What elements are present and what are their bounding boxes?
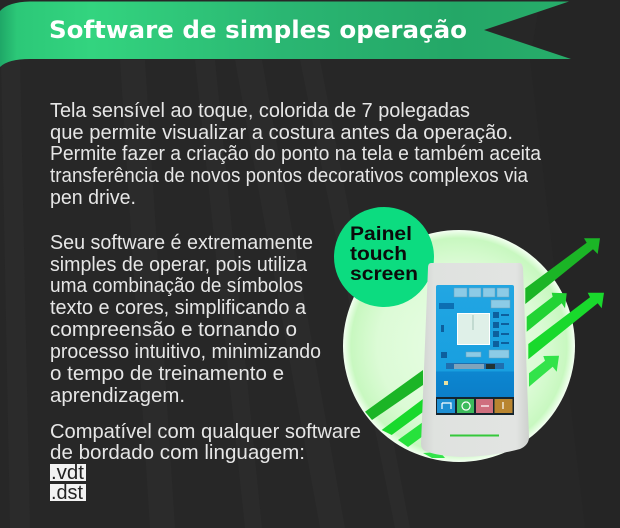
file format tag: dst: .dst [51,482,83,504]
text block: intro: transferência de novos pontos decorativos complexos via [50,165,529,187]
stitch preview [458,314,490,344]
text block: compatibility: de bordado com linguagem: [50,442,305,464]
callout badge: Painel [350,224,412,245]
text block: intro: Tela sensível ao toque, colorida de 7 polegadas [50,100,470,122]
title: Software de simples operação [49,16,467,44]
callout badge: touch [350,244,407,265]
text block: software description: processo intuitivo, minimizando [50,341,321,363]
text block: software description: o tempo de treinamento e [50,363,284,385]
file format tag: vdt: .vdt [51,462,84,484]
text block: software description: aprendizagem. [50,385,185,407]
text block: software description: Seu software é extremamente [50,232,313,254]
text block: intro [50,100,542,209]
text block: intro: Permite fazer a criação do ponto na tela e também aceita [50,143,542,165]
text block: software description: uma combinação de símbolos [50,275,303,297]
text block: software description [50,232,321,407]
text block: software description: texto e cores, simplificando a [50,297,307,319]
title ribbon [0,2,571,67]
callout badge [334,207,434,307]
text block: compatibility: Compatível com qualquer software [50,421,361,443]
text block: intro: pen drive. [50,187,136,209]
illustration: touch panel on green disc [334,207,604,462]
small yellow square [444,381,448,385]
touchscreen [436,285,514,415]
screen side readouts [441,312,509,358]
arrows [365,238,604,458]
callout badge: screen [350,264,418,285]
screen icons [454,288,510,358]
text block: software description: simples de operar, pois utiliza [50,254,308,276]
text block: intro: que permite visualizar a costura antes da operação. [50,122,513,144]
slider [446,363,504,369]
text block: software description: compreensão e tornando o [50,319,297,341]
soft buttons [436,397,514,415]
disc [343,230,575,462]
panel device [421,263,529,457]
green light [450,434,499,436]
text block: compatibility [50,421,361,464]
